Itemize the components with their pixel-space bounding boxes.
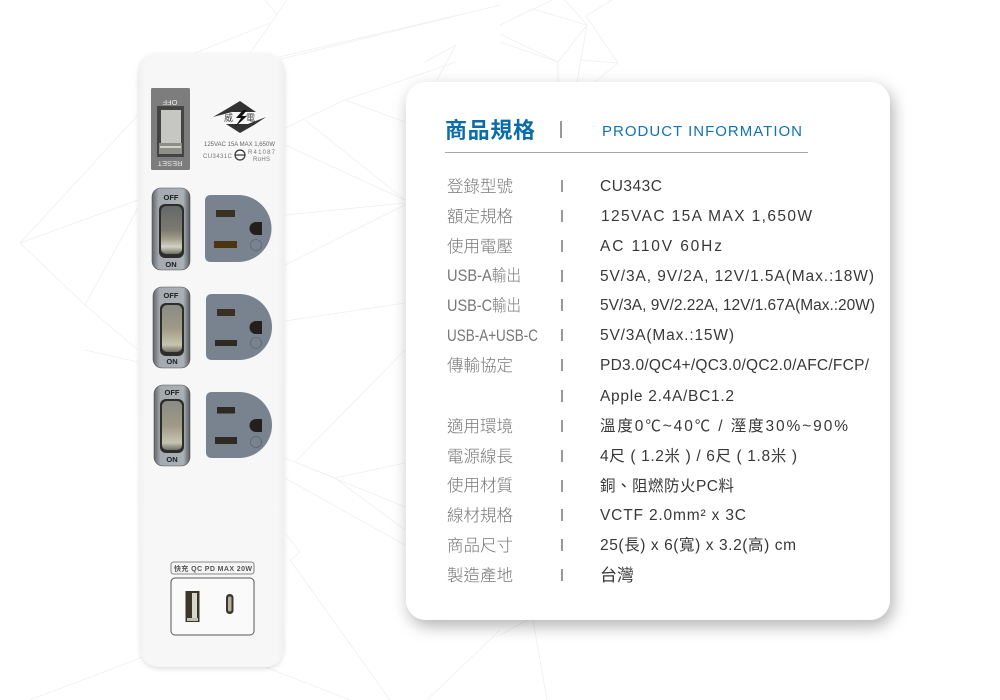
heading: PRODUCT INFORMATION	[602, 123, 802, 140]
spec row: USB-A+USB-C	[447, 327, 734, 345]
spec row: 傳輸協定: PD3.0/QC4+/QC3.0/QC2.0/AFC/FCP/	[600, 357, 870, 374]
spec row: 登錄型號: 登錄型號	[447, 177, 513, 196]
spec row: USB-C輸出: USB-C輸出	[447, 296, 521, 315]
spec row: USB-A+USB-C: 5V/3A(Max.:15W)	[600, 327, 734, 344]
outlet 3	[206, 392, 272, 458]
spec row: 適用環境: 適用環境	[447, 417, 513, 436]
outlet switch 3	[154, 385, 190, 466]
spec row: 製造產地: 台灣	[600, 566, 634, 585]
spec row: 額定規格: 125VAC 15A MAX 1,650W	[601, 208, 812, 225]
outlet 2	[206, 294, 272, 360]
spec row: USB-A輸出	[447, 266, 874, 285]
spec row: USB-A輸出: 5V/3A, 9V/2A, 12V/1.5A(Max.:18W)	[600, 268, 874, 285]
background: faint polygon line pattern	[20, 0, 618, 700]
USB port panel	[171, 578, 254, 635]
outlet switch 2: ON	[166, 357, 178, 366]
certification logo and ratings: RoHS	[253, 157, 270, 163]
spec row: 線材規格: 線材規格	[447, 506, 514, 525]
spec row: 傳輸協定 continued: Apple 2.4A/BC1.2	[600, 388, 734, 405]
outlet switch 1	[152, 188, 190, 270]
spec row: 適用環境	[447, 417, 848, 436]
spec row: 使用材質: 使用材質	[447, 476, 513, 495]
outlet switch 2	[153, 287, 190, 368]
spec row: 登錄型號	[447, 177, 662, 196]
spec row: 適用環境: 溫度0℃~40℃ / 溼度30%~90%	[600, 417, 848, 435]
spec row: 商品尺寸	[447, 536, 796, 555]
spec row: 額定規格: 額定規格	[447, 207, 514, 226]
outlet 1	[205, 195, 271, 262]
spec row: USB-C輸出	[447, 296, 875, 315]
reset master switch: OFF	[162, 98, 178, 107]
certification logo and ratings: CU3431C	[203, 154, 233, 160]
certification logo and ratings: 125VAC 15A MAX 1,650W	[204, 142, 275, 148]
outlet switch 3: OFF	[164, 388, 180, 397]
spec row: 電源線長: 4尺 ( 1.2米 ) / 6尺 ( 1.8米 )	[600, 447, 797, 465]
spec row: 登錄型號: CU343C	[600, 178, 662, 195]
spec row: 電源線長: 電源線長	[447, 447, 513, 466]
outlet switch 2: OFF	[164, 291, 179, 300]
heading: 商品規格	[445, 118, 535, 143]
spec row: USB-C輸出: 5V/3A, 9V/2.22A, 12V/1.67A(Max.:20W)	[600, 297, 875, 314]
reset master switch: RESET	[157, 159, 183, 168]
spec row: 製造產地: 製造產地	[447, 566, 513, 585]
outlet switch 3: ON	[166, 455, 178, 464]
fast charge label: 快充 QC PD MAX 20W	[174, 564, 252, 573]
spec row: 製造產地	[447, 566, 634, 585]
spec row: 使用電壓	[447, 237, 722, 256]
outlet switch 1: OFF	[164, 193, 179, 202]
panel: product specifications card	[406, 82, 890, 620]
spec row: USB-A+USB-C: USB-A+USB-C	[447, 327, 538, 345]
spec row: 使用材質: 銅、阻燃防火PC料	[600, 477, 734, 495]
outlet switch 1: ON	[165, 260, 177, 269]
spec row: USB-A輸出: USB-A輸出	[447, 266, 521, 285]
power strip body	[138, 53, 285, 667]
fast charge label	[171, 562, 254, 574]
spec row: 傳輸協定	[447, 356, 870, 375]
spec row: 傳輸協定: 傳輸協定	[447, 356, 513, 375]
spec row: 商品尺寸: 商品尺寸	[447, 536, 513, 555]
certification logo and ratings: 威	[224, 112, 233, 123]
certification logo and ratings: 電	[246, 113, 255, 123]
spec row: 使用電壓: 使用電壓	[447, 237, 513, 256]
spec row: 電源線長	[447, 447, 797, 466]
heading	[445, 118, 808, 152]
spec row: 額定規格	[447, 207, 812, 226]
spec row: 使用材質	[447, 476, 734, 495]
spec row: 線材規格: VCTF 2.0mm² x 3C	[600, 507, 746, 524]
reset master switch	[151, 88, 190, 170]
certification logo and ratings: R41087	[248, 150, 276, 156]
spec row: 線材規格	[447, 506, 746, 525]
spec row: 使用電壓: AC 110V 60Hz	[600, 238, 722, 255]
certification logo and ratings	[203, 101, 276, 163]
spec row: 商品尺寸: 25(長) x 6(寬) x 3.2(高) cm	[600, 536, 796, 554]
